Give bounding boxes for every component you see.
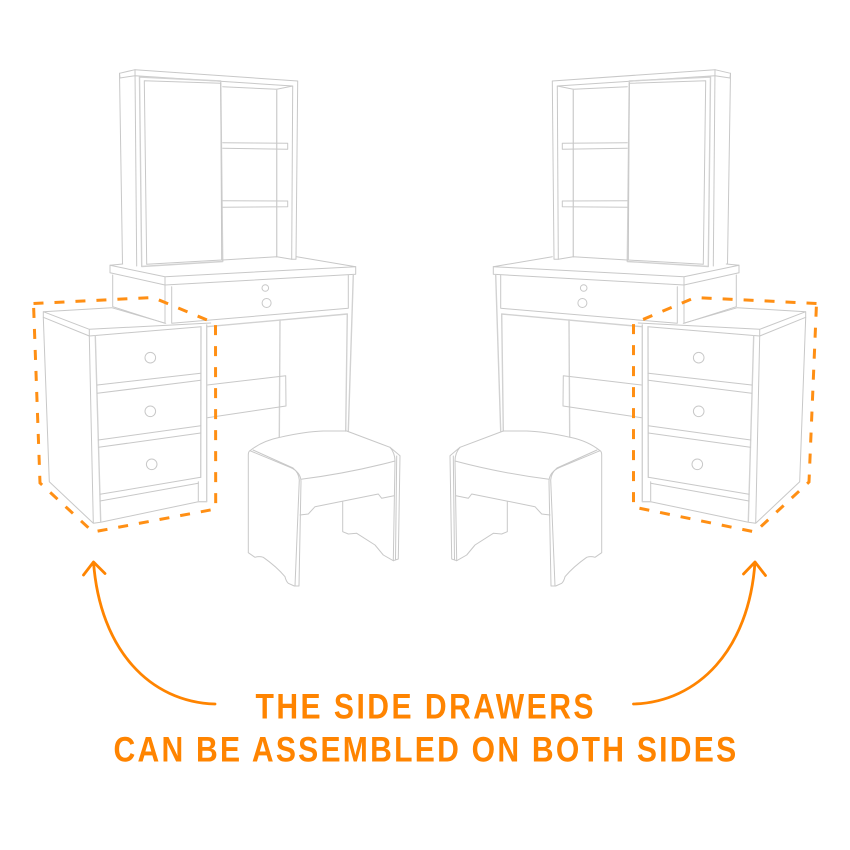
- right dressing table: [450, 70, 806, 586]
- right stool: [450, 431, 602, 586]
- caption line 1: THE SIDE DRAWERS: [256, 686, 593, 726]
- left table top and upper drawer: [110, 257, 356, 437]
- left dashed highlight around side drawers: [34, 298, 216, 532]
- right dashed highlight around side drawers: [634, 298, 816, 532]
- left hutch with mirror and shelves: [120, 70, 298, 266]
- left curved arrow: [84, 562, 215, 704]
- right hutch with mirror and shelves: [552, 70, 730, 266]
- left side drawer cabinet: [43, 308, 211, 523]
- left stool: [248, 431, 400, 586]
- caption line 2: CAN BE ASSEMBLED ON BOTH SIDES: [114, 730, 736, 769]
- right side drawer cabinet: [638, 308, 806, 523]
- left dressing table: [43, 70, 400, 586]
- caption: [114, 686, 736, 769]
- right curved arrow: [634, 562, 766, 704]
- right table top and upper drawer: [493, 257, 739, 437]
